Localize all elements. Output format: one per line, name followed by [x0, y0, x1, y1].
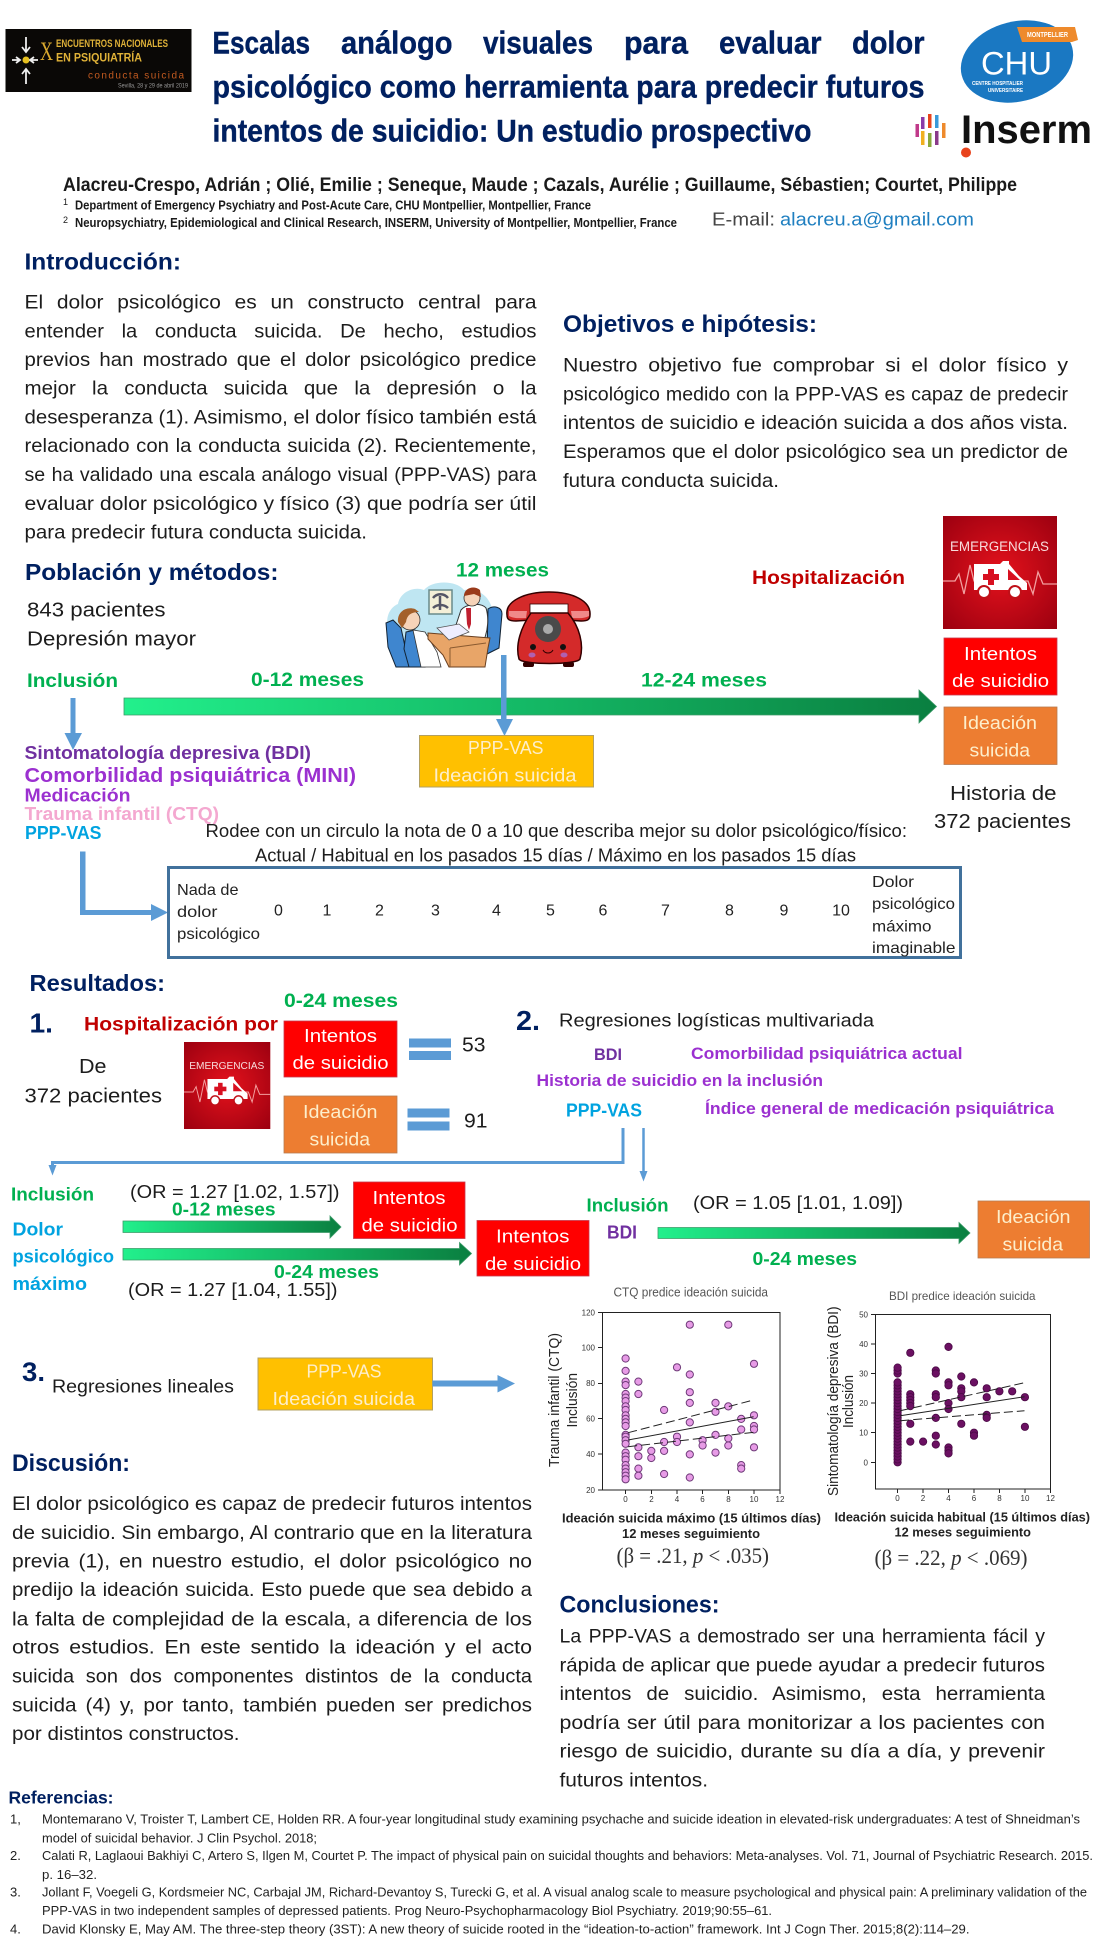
- scale: números: 7: [661, 902, 670, 920]
- heading: discusión: Discusión:: [12, 1450, 130, 1477]
- panel: discusión: [12, 1450, 532, 1745]
- text: introducción: mejor la conducta suicida que la depresión o la: [24, 378, 537, 400]
- icon: teléfono: [507, 592, 590, 667]
- text: OR 0-12 meses: (OR = 1.27 [1.02, 1.57]): [130, 1182, 340, 1202]
- logo: Encuentros Nacionales en Psiquiatría: ENCUENTROS NACIONALES: [56, 38, 168, 50]
- affiliations: 1: [63, 197, 68, 207]
- heading: referencias: Referencias:: [8, 1788, 114, 1808]
- scale: etiqueta mínima: [177, 882, 260, 943]
- chart: BDI predice ideación suicida: 4: [946, 1494, 951, 1503]
- text: objetivos: [563, 354, 1069, 492]
- chart: CTQ predice ideación suicida: 40: [586, 1450, 596, 1459]
- chart: CTQ predice ideación suicida: 8: [726, 1495, 731, 1504]
- box: intentos 0-24: Intentos: [496, 1226, 570, 1246]
- chart: BDI predice ideación suicida: Sintomatología depresiva (BDI): [825, 1306, 842, 1496]
- label: 0-24 meses: 0-24 meses: [752, 1249, 857, 1269]
- label: hospitalización: Hospitalización: [752, 568, 905, 589]
- list: medidas de inclusión: Medicación: [24, 786, 130, 806]
- chart: CTQ predice ideación suicida: 60: [586, 1414, 596, 1424]
- icon: emergencias: [184, 1042, 270, 1129]
- chart: CTQ predice ideación suicida: 2: [649, 1495, 654, 1504]
- scale: etiqueta mínima: Nada de: [177, 882, 239, 899]
- list: covariables: BDI: [594, 1045, 622, 1064]
- arrow: PPP-VAS a la escala: [80, 852, 168, 921]
- chart: CTQ predice ideación suicida: 12: [776, 1495, 785, 1504]
- title: análogo: [341, 24, 452, 60]
- chart: CTQ predice ideación suicida: 100: [582, 1344, 596, 1352]
- scale: etiqueta máxima: [872, 874, 956, 957]
- chart: CTQ predice ideación suicida: (β = .21, p < .035): [616, 1543, 769, 1568]
- label: 0-12 meses: 0-12 meses: [172, 1200, 276, 1220]
- text: historia de 372 pacientes: 372 pacientes: [934, 811, 1071, 833]
- logo: Encuentros Nacionales en Psiquiatría: conducta suicida: [88, 70, 184, 82]
- number: 53: 53: [462, 1034, 486, 1056]
- list: referencias: p. 16–32.: [42, 1867, 97, 1882]
- chart: CTQ predice ideación suicida: 80: [586, 1379, 596, 1388]
- text: objetivos: Nuestro objetivo fue comprobar si el dolor físico y: [563, 354, 1068, 376]
- list: referencias: [10, 1812, 1093, 1936]
- scale: números: 3: [431, 902, 440, 920]
- logo: Encuentros Nacionales en Psiquiatría: EN PSIQUIATRÍA: [56, 50, 142, 64]
- icon: igual 91: [408, 1108, 450, 1130]
- box: intentos de suicidio: de suicidio: [292, 1053, 388, 1073]
- list: referencias: 2.: [10, 1848, 21, 1863]
- label: 0-24 meses: 0-24 meses: [274, 1262, 379, 1282]
- chart: BDI predice ideación suicida: 40: [859, 1340, 869, 1349]
- chart: BDI predice ideación suicida: 0: [864, 1458, 869, 1468]
- title: para: [624, 24, 688, 60]
- text: muestra: Depresión mayor: [27, 628, 196, 650]
- panel: población y métodos: [24, 516, 1071, 958]
- logo: Encuentros Nacionales en Psiquiatría: [6, 29, 192, 92]
- e-mail: [712, 208, 974, 230]
- text: OR 0-24 meses: (OR = 1.27 [1.04, 1.55]): [128, 1280, 338, 1300]
- title: psicológico como herramienta para predecir futuros: [212, 68, 924, 104]
- scale: etiqueta mínima: psicológico: [177, 926, 260, 943]
- heading: objetivos: Objetivos e hipótesis:: [563, 311, 817, 338]
- scale: números: 0: [274, 902, 283, 920]
- title: visuales: [483, 24, 593, 60]
- list: referencias: Calati R, Laglaoui Bakhiyi C, Artero S, Ilgen M, Courtet P. The impact of physical pain on suicidal thoughts and behaviors: Meta-analyses. Vol. 71, Journal of Psychiatric Research. 2015.: [42, 1848, 1093, 1863]
- arrow: a gráficos: [432, 1375, 515, 1392]
- chart: BDI predice ideación suicida: 12 meses seguimiento: [894, 1526, 1031, 1540]
- box: ideación suicida: [978, 1201, 1090, 1258]
- scale: números: 8: [725, 902, 734, 920]
- chart: BDI predice ideación suicida: 2: [921, 1494, 926, 1503]
- label: 0-12 meses: 0-12 meses: [251, 670, 364, 691]
- box: ideación suicida: Ideación: [303, 1102, 378, 1122]
- number: 91: 91: [464, 1110, 488, 1132]
- panel: conclusiones: [560, 1592, 1046, 1792]
- box: evaluación 12 meses: Ideación suicida: [434, 766, 578, 786]
- icon: igual 53: [409, 1038, 451, 1060]
- chart: CTQ predice ideación suicida: CTQ predice ideación suicida: [614, 1286, 768, 1300]
- arrow: inclusión a evaluaciones: [64, 698, 82, 750]
- heading: población y métodos: Población y métodos:: [25, 559, 278, 585]
- text: introducción: entender la conducta suicida. De hecho, estudios: [24, 320, 537, 342]
- label: dolor psicológico máximo: máximo: [12, 1274, 87, 1294]
- chart: BDI predice ideación suicida: Ideación suicida habitual (15 últimos días): [834, 1510, 1090, 1524]
- box: intentos 0-12: de suicidio: [362, 1216, 458, 1236]
- text: introducción: para predecir futura conducta suicida.: [24, 522, 367, 544]
- panel: resultados: [11, 970, 1090, 1410]
- list: referencias: David Klonsky E, May AM. The three-step theory (3ST): A new theory of suicide rooted in the “ideation-to-action” framework. Int J Cogn Ther. 2015;8(2):114–29.: [42, 1922, 970, 1936]
- box: intentos de suicidio: Intentos: [304, 1026, 377, 1046]
- logo: Inserm: Inserm: [961, 108, 1092, 152]
- text: introducción: relacionado con la conducta suicida (2). Recientemente,: [24, 435, 536, 457]
- chart: CTQ predice ideación suicida: 20: [586, 1486, 596, 1495]
- box: intentos de suicidio: [944, 638, 1057, 695]
- text: regresiones logísticas: Regresiones logísticas multivariada: [559, 1010, 875, 1030]
- chart: BDI predice ideación suicida: 10: [859, 1428, 869, 1438]
- text: OR BDI: (OR = 1.05 [1.01, 1.09]): [693, 1193, 903, 1213]
- text: muestra: 843 pacientes: [27, 600, 166, 622]
- label: dolor psicológico máximo: [12, 1220, 114, 1294]
- arrow: resultado a la derecha: [640, 1128, 648, 1182]
- logo: Encuentros Nacionales en Psiquiatría: X: [40, 37, 53, 66]
- icon: emergencias: EMERGENCIAS: [950, 539, 1049, 554]
- scale: números: 10: [832, 902, 850, 920]
- scale: números: 4: [492, 902, 501, 920]
- logo: CHU Montpellier: MONTPELLIER: [1027, 32, 1068, 39]
- box: ideación suicida: suicida: [310, 1130, 371, 1150]
- text: de 372 pacientes: 372 pacientes: [24, 1086, 162, 1108]
- logo: CHU Montpellier: CENTRE HOSPITALIER: [972, 81, 1023, 87]
- text: conclusiones: intentos de suicidio. Asimismo, esta herramienta: [560, 1683, 1045, 1705]
- box: ideación suicida: suicida: [1002, 1234, 1064, 1254]
- list: covariables: Historia de suicidio en la inclusión: [536, 1071, 823, 1090]
- text: discusión: suicida son dos componentes distintos de la conducta: [12, 1666, 532, 1688]
- box: intentos 0-12: [354, 1182, 465, 1238]
- text: instrucción de la escala: [206, 821, 907, 866]
- list: medidas de inclusión: Sintomatología depresiva (BDI): [24, 743, 311, 763]
- box: intentos 0-12: Intentos: [372, 1188, 446, 1208]
- text: conclusiones: riesgo de suicidio, durante su día a día, y prevenir: [560, 1740, 1046, 1762]
- chart: CTQ predice ideación suicida: 4: [675, 1495, 680, 1504]
- scale: números: 2: [375, 902, 384, 920]
- scale: números: 5: [546, 902, 555, 920]
- chart: CTQ predice ideación suicida: [546, 1286, 821, 1568]
- text: discusión: [12, 1493, 532, 1745]
- list: referencias: 3.: [10, 1884, 21, 1900]
- chart: BDI predice ideación suicida: 12: [1046, 1494, 1055, 1503]
- label: dolor psicológico máximo: psicológico: [12, 1246, 114, 1266]
- box: intentos 0-24: de suicidio: [485, 1254, 581, 1274]
- title: Escalas: [212, 24, 310, 60]
- box: intentos de suicidio: Intentos: [964, 644, 1037, 664]
- chart: CTQ predice ideación suicida: 0: [623, 1495, 628, 1504]
- e-mail: E-mail:: [712, 208, 775, 230]
- logo: Encuentros Nacionales en Psiquiatría: Sevilla, 28 y 29 de abril 2019: [118, 84, 189, 90]
- label: inclusión: Inclusión: [27, 671, 118, 692]
- arrow: 12 meses a evaluación: [496, 655, 513, 736]
- scale: PPP-VAS: [168, 868, 960, 958]
- panel: objetivos e hipótesis: [563, 311, 1069, 492]
- scale: etiqueta máxima: psicológico: [872, 896, 955, 913]
- box: PPP-VAS ideación suicida: PPP-VAS: [306, 1362, 382, 1382]
- text: historia de 372 pacientes: [934, 783, 1071, 833]
- chart: BDI predice ideación suicida: 8: [997, 1494, 1002, 1503]
- list: covariables: Índice general de medicación psiquiátrica: [705, 1099, 1055, 1118]
- e-mail: alacreu.a@gmail.com: [780, 208, 974, 230]
- list: referencias: 4.: [10, 1922, 21, 1936]
- text: conclusiones: rápida de aplicar que puede ayudar a predecir futuros: [560, 1654, 1045, 1676]
- chart: CTQ predice ideación suicida: 10: [750, 1495, 759, 1504]
- logo: CHU Montpellier: [952, 9, 1082, 114]
- logo: CHU Montpellier: CHU: [981, 46, 1052, 82]
- text: introducción: evaluar dolor psicológico y físico (3) que podría ser útil: [24, 493, 536, 515]
- text: objetivos: Esperamos que el dolor psicológico sea un predictor de: [563, 441, 1068, 463]
- box: ideación suicida: [944, 707, 1057, 764]
- logo: Inserm: [916, 108, 1092, 158]
- label: 12 meses: 12 meses: [456, 560, 549, 582]
- list: medidas de inclusión: Trauma infantil (CTQ): [24, 804, 219, 824]
- text: conclusiones: La PPP-VAS a demostrado ser una herramienta fácil y: [560, 1626, 1045, 1648]
- text: muestra: [27, 600, 196, 650]
- scale: números: 6: [599, 902, 608, 920]
- text: objetivos: futura conducta suicida.: [563, 470, 779, 492]
- list: covariables: PPP-VAS: [566, 1100, 642, 1120]
- text: de 372 pacientes: [24, 1056, 162, 1108]
- icon: consulta médica: [386, 582, 502, 667]
- affiliations: [63, 197, 677, 230]
- text: introducción: El dolor psicológico es un constructo central para: [24, 292, 537, 314]
- list: medidas de inclusión: Comorbilidad psiquiátrica (MINI): [24, 765, 356, 787]
- list: referencias: 1,: [10, 1812, 21, 1826]
- heading: introducción: Introducción:: [24, 248, 181, 274]
- chart: BDI predice ideación suicida: 30: [859, 1370, 869, 1378]
- logo: CHU Montpellier: UNIVERSITAIRE: [988, 88, 1024, 94]
- box: evaluación 12 meses: [420, 736, 594, 787]
- text: discusión: predijo la ideación suicida. Esto puede que sea debido a: [12, 1579, 532, 1601]
- scale: etiqueta máxima: máximo: [872, 918, 932, 936]
- chart: CTQ predice ideación suicida: Trauma infantil (CTQ): [546, 1333, 563, 1467]
- text: instrucción de la escala: Actual / Habitual en los pasados 15 días / Máximo en los pasados 15 días: [255, 846, 856, 866]
- box: PPP-VAS ideación suicida: [258, 1358, 432, 1410]
- text: introducción: [24, 292, 537, 544]
- list: medidas de inclusión: PPP-VAS: [25, 823, 102, 843]
- arrow: línea temporal: [124, 690, 936, 723]
- box: intentos de suicidio: [284, 1021, 397, 1077]
- heading: resultados: Resultados:: [30, 970, 165, 996]
- title: evaluar: [719, 24, 822, 60]
- label: hospitalización por: Hospitalización por: [84, 1014, 279, 1036]
- text: discusión: El dolor psicológico es capaz de predecir futuros intentos: [12, 1493, 532, 1515]
- chart: BDI predice ideación suicida: 6: [972, 1494, 977, 1503]
- arrow: 0-12 meses: [123, 1216, 341, 1238]
- scale: etiqueta mínima: dolor: [177, 904, 218, 921]
- title: [212, 24, 924, 148]
- label: inclusión: Inclusión: [11, 1184, 94, 1204]
- box: intentos de suicidio: de suicidio: [952, 671, 1049, 691]
- box: evaluación 12 meses: PPP-VAS: [468, 738, 544, 758]
- text: conclusiones: futuros intentos.: [560, 1770, 708, 1792]
- label: 12-24 meses: 12-24 meses: [641, 670, 767, 692]
- text: discusión: la falta de complejidad de la escala, a diferencia de los: [12, 1608, 532, 1630]
- scale: etiqueta máxima: Dolor: [872, 874, 915, 891]
- chart: BDI predice ideación suicida: 20: [859, 1399, 869, 1408]
- scale: números: 1: [323, 902, 332, 920]
- arrow: 0-24 meses: [123, 1242, 472, 1265]
- heading: conclusiones: Conclusiones:: [560, 1592, 720, 1618]
- icon: emergencias: EMERGENCIAS: [189, 1061, 264, 1072]
- text: discusión: previa (1), en nuestro estudio, el dolor psicológico no: [12, 1550, 532, 1572]
- text: conclusiones: [560, 1626, 1046, 1792]
- text: introducción: se ha validado una escala análogo visual (PPP-VAS) para: [24, 464, 537, 486]
- list: referencias: Montemarano V, Troister T, Lambert CE, Holden RR. A four-year longitudinal study examining psychache and suicide ideation in elevated-risk undergraduates: A test of Shneidman’s: [42, 1812, 1080, 1826]
- text: discusión: de suicidio. Sin embargo, Al contrario que en la literatura: [12, 1522, 532, 1544]
- number: 1: 1.: [30, 1008, 53, 1038]
- chart: BDI predice ideación suicida: [825, 1289, 1090, 1570]
- chart: BDI predice ideación suicida: 10: [1021, 1494, 1030, 1503]
- text: de 372 pacientes: De: [79, 1056, 106, 1078]
- arrow: resultado a la izquierda: [48, 1128, 623, 1176]
- title: dolor: [852, 24, 924, 60]
- list: medidas de inclusión: [24, 743, 356, 843]
- text: introducción: previos han mostrado que el dolor psicológico predice: [24, 349, 536, 371]
- text: historia de 372 pacientes: Historia de: [950, 783, 1056, 805]
- arrow: BDI a ideación: [658, 1222, 970, 1244]
- affiliations: Department of Emergency Psychiatry and Post-Acute Care, CHU Montpellier, Montpellier, France: [75, 198, 591, 212]
- chart: BDI predice ideación suicida: 50: [859, 1310, 869, 1320]
- scale: números: [274, 902, 850, 920]
- icon: emergencias: [943, 516, 1057, 629]
- list: covariables: Comorbilidad psiquiátrica actual: [691, 1044, 962, 1063]
- label: 0-24 meses: 0-24 meses: [284, 991, 398, 1012]
- text: regresiones lineales: Regresiones lineales: [52, 1376, 234, 1396]
- chart: CTQ predice ideación suicida: 120: [582, 1308, 596, 1318]
- text: objetivos: intentos de suicidio e ideación suicida a dos años vista.: [563, 412, 1068, 434]
- text: objetivos: psicológico medido con la PPP-VAS es capaz de predecir: [563, 384, 1069, 406]
- scale: etiqueta máxima: imaginable: [872, 940, 956, 957]
- number: 2: 2.: [516, 1005, 540, 1036]
- number: 3: 3.: [22, 1357, 45, 1387]
- text: introducción: desesperanza (1). Asimismo, el dolor físico también está: [24, 406, 537, 428]
- text: discusión: otros estudios. En este sentido la ideación y el acto: [12, 1636, 532, 1658]
- title: intentos de suicidio: Un estudio prospectivo: [212, 112, 812, 148]
- box: PPP-VAS ideación suicida: Ideación suicida: [272, 1389, 416, 1409]
- text: discusión: suicida (4) y, por tanto, también pueden ser predichos: [12, 1694, 532, 1716]
- label: BDI: BDI: [607, 1222, 637, 1242]
- panel: introducción: [24, 248, 537, 544]
- chart: CTQ predice ideación suicida: Inclusión: [564, 1373, 581, 1428]
- chart: BDI predice ideación suicida: Inclusión: [840, 1375, 857, 1428]
- box: ideación suicida: suicida: [970, 740, 1031, 760]
- scale: números: 9: [780, 902, 789, 920]
- box: ideación suicida: Ideación: [996, 1207, 1070, 1227]
- chart: CTQ predice ideación suicida: Ideación suicida máximo (15 últimos días): [562, 1512, 821, 1526]
- label: inclusión: Inclusión: [586, 1196, 668, 1216]
- chart: BDI predice ideación suicida: (β = .22, p < .069): [874, 1545, 1028, 1570]
- authors: Alacreu-Crespo, Adrián ; Olié, Emilie ; Seneque, Maude ; Cazals, Aurélie ; Guillaume, Sébastien; Courtet, Philippe: [63, 175, 1017, 196]
- affiliations: 2: [63, 215, 68, 225]
- box: ideación suicida: Ideación: [962, 713, 1037, 733]
- text: conclusiones: podría ser útil para monitorizar a los pacientes con: [560, 1712, 1045, 1734]
- panel: referencias: [8, 1788, 1093, 1936]
- chart: CTQ predice ideación suicida: 12 meses seguimiento: [622, 1527, 760, 1541]
- box: ideación suicida: [284, 1096, 397, 1153]
- list: referencias: Jollant F, Voegeli G, Kordsmeier NC, Carbajal JM, Richard-Devantoy S, Turecki G, et al. A visual analog scale to measure psychological and physical pain: A preliminary validation of the: [42, 1884, 1087, 1900]
- list: referencias: PPP-VAS in two independent samples of depressed patients. Prog Neuro-Psychopharmacology Biol Psychiatry. 2019;90:55–61.: [42, 1903, 772, 1918]
- text: discusión: por distintos constructos.: [12, 1723, 240, 1745]
- label: dolor psicológico máximo: Dolor: [12, 1220, 63, 1240]
- list: covariables: [536, 1044, 1055, 1120]
- chart: BDI predice ideación suicida: 0: [895, 1494, 900, 1503]
- chart: BDI predice ideación suicida: BDI predice ideación suicida: [889, 1289, 1036, 1303]
- chart: CTQ predice ideación suicida: 6: [700, 1495, 705, 1504]
- affiliations: Neuropsychiatry, Epidemiological and Clinical Research, INSERM, University of Montpellier, Montpellier, France: [75, 216, 677, 230]
- box: intentos 0-24: [477, 1220, 589, 1276]
- text: instrucción de la escala: Rodee con un circulo la nota de 0 a 10 que describa mejor su dolor psicológico/físico:: [206, 821, 907, 841]
- list: referencias: model of suicidal behavior. J Clin Psychol. 2018;: [42, 1830, 317, 1846]
